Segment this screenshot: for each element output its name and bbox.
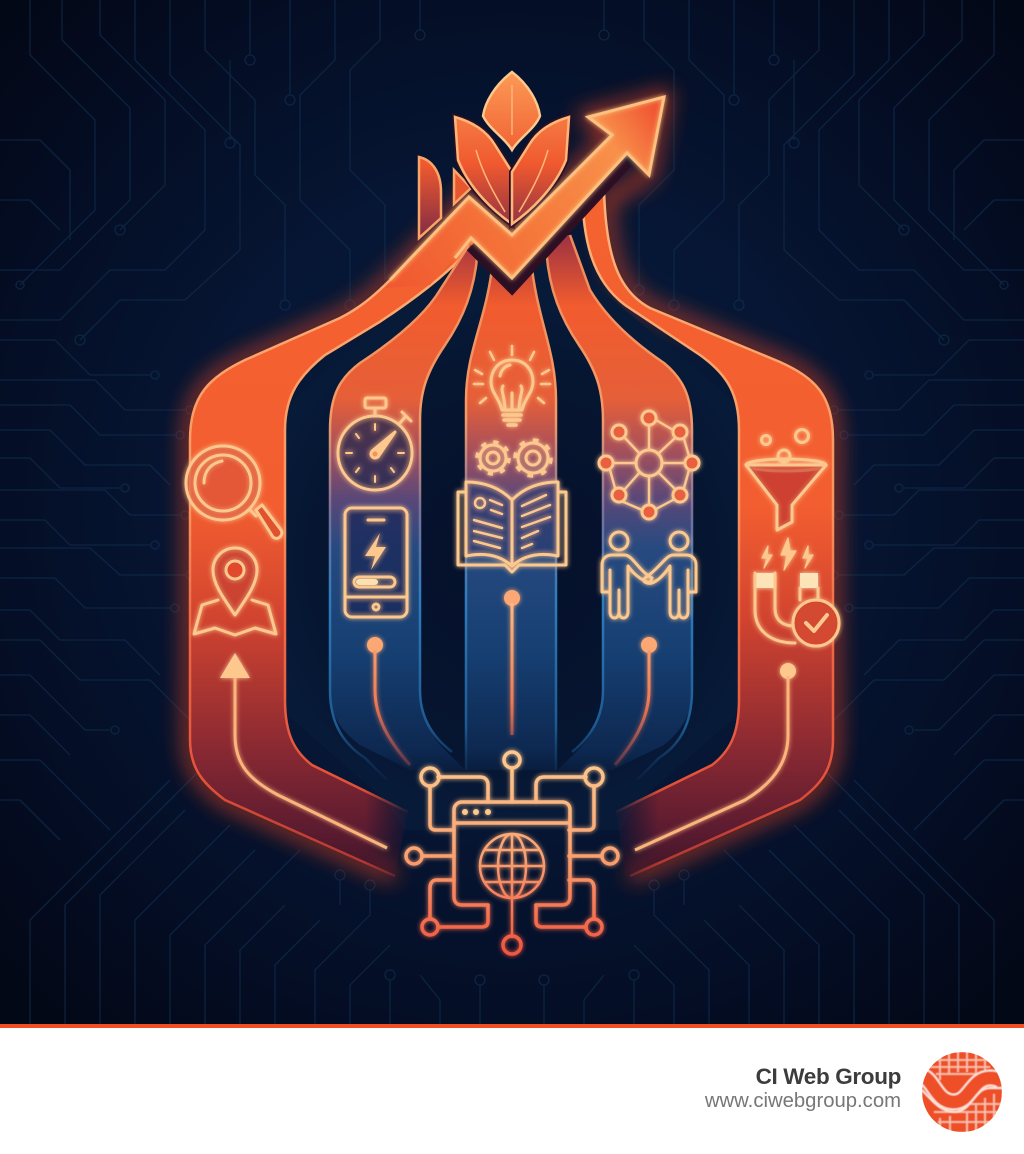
brand text: CI Web Group [756,1064,901,1089]
icon: gears [478,440,550,476]
right leaf [512,117,569,224]
globe [480,834,544,937]
second left stream [330,245,478,770]
left stubs [419,157,441,238]
outer glow behind shape [190,97,833,876]
right outer stream [582,190,834,876]
center stream [466,260,556,770]
icon: magnet with check [755,538,839,646]
second right stream [546,235,692,770]
icon: magnifying glass [186,446,282,538]
left outer stream [190,197,480,876]
connector line: phone [367,637,410,765]
connector line: book [504,590,520,735]
center leaf [483,72,540,150]
icon: open book [458,482,566,572]
icon: handshake [602,532,696,618]
icon: light bulb [474,346,550,425]
hub circuit nodes [422,769,602,927]
icon: phone with bolt [345,508,407,617]
growth arrow [385,97,664,288]
icon: stopwatch [338,398,412,490]
logo [922,1052,1002,1132]
browser window [454,802,570,905]
flower crown [419,72,569,238]
connector line: handshake [615,637,657,765]
icon: funnel [746,430,826,530]
brand text [704,1064,901,1112]
connector line: magnet [635,663,796,850]
left leaf [455,117,512,224]
arrow: left upward path [220,653,387,848]
footer accent line [0,1024,1024,1028]
icon: network [599,411,699,519]
icon: map pin [194,548,276,635]
icon: website hub [406,752,618,954]
brand text: www.ciwebgroup.com [705,1090,901,1112]
dark interior of funnel shape [270,245,755,830]
